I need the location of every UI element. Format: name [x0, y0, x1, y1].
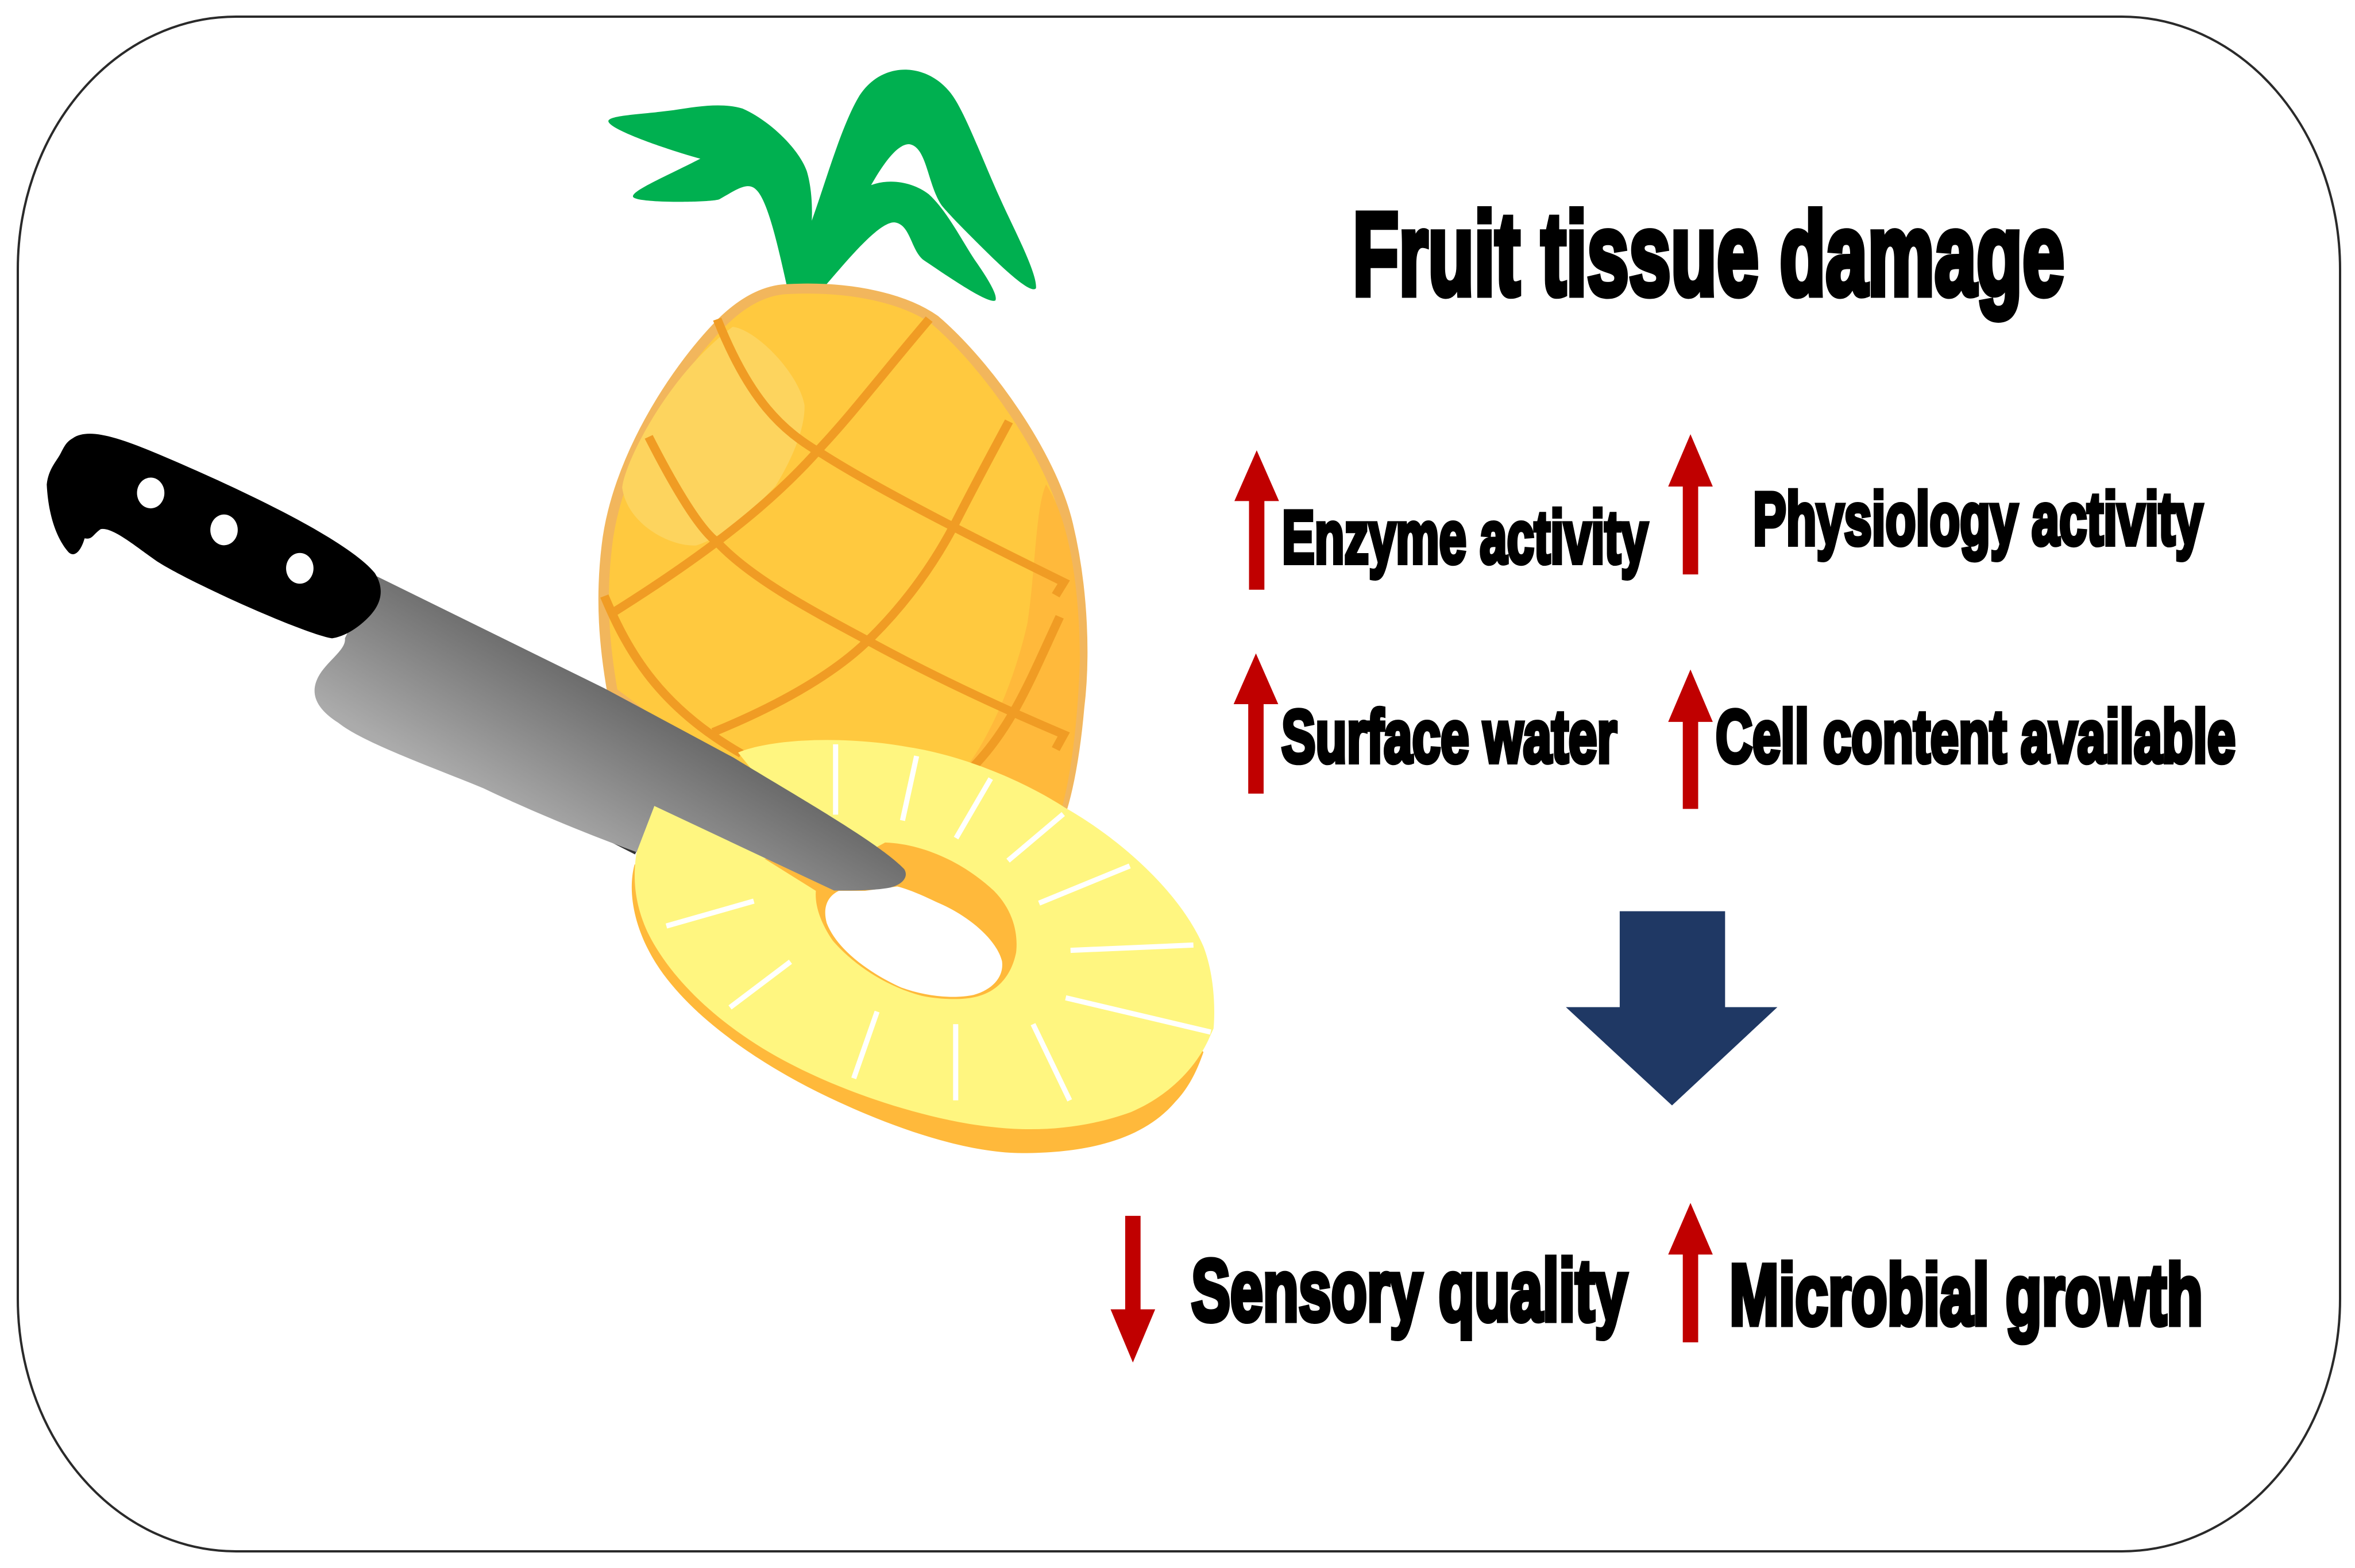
arrow: enzyme activity up	[1234, 450, 1279, 590]
ring top face	[635, 740, 1214, 1129]
knife handle	[47, 434, 381, 638]
knife blade	[315, 576, 906, 891]
illustration: pineapple and knife	[47, 69, 1214, 1153]
blade underside sliver	[600, 837, 638, 855]
label: enzyme activity: Enzyme activity	[1282, 495, 1648, 579]
arrow: large down arrow	[1566, 912, 1777, 1106]
highlight on body	[622, 327, 805, 546]
arrows group	[1110, 434, 1777, 1362]
ring side	[632, 864, 1203, 1153]
icon: knife	[47, 434, 906, 891]
label: sensory quality: Sensory quality	[1191, 1242, 1627, 1339]
ring spokes	[666, 744, 1211, 1100]
ring inner wall	[765, 843, 1017, 999]
ring hole	[825, 886, 1002, 997]
knife rivets	[137, 478, 314, 584]
icon: pineapple crown	[608, 69, 1036, 301]
arrow: sensory quality down	[1110, 1216, 1155, 1362]
arrow: physiology activity up	[1668, 434, 1713, 574]
body crosshatch lines	[604, 319, 1064, 773]
arrow: cell content up	[1668, 670, 1713, 809]
icon: pineapple ring slice	[632, 740, 1214, 1153]
label: surface water: Surface water	[1281, 694, 1617, 778]
arrow: surface water up	[1234, 654, 1278, 794]
shaded right side of body	[959, 485, 1080, 815]
arrow: microbial growth up	[1668, 1203, 1713, 1342]
icon: pineapple body	[604, 288, 1082, 815]
